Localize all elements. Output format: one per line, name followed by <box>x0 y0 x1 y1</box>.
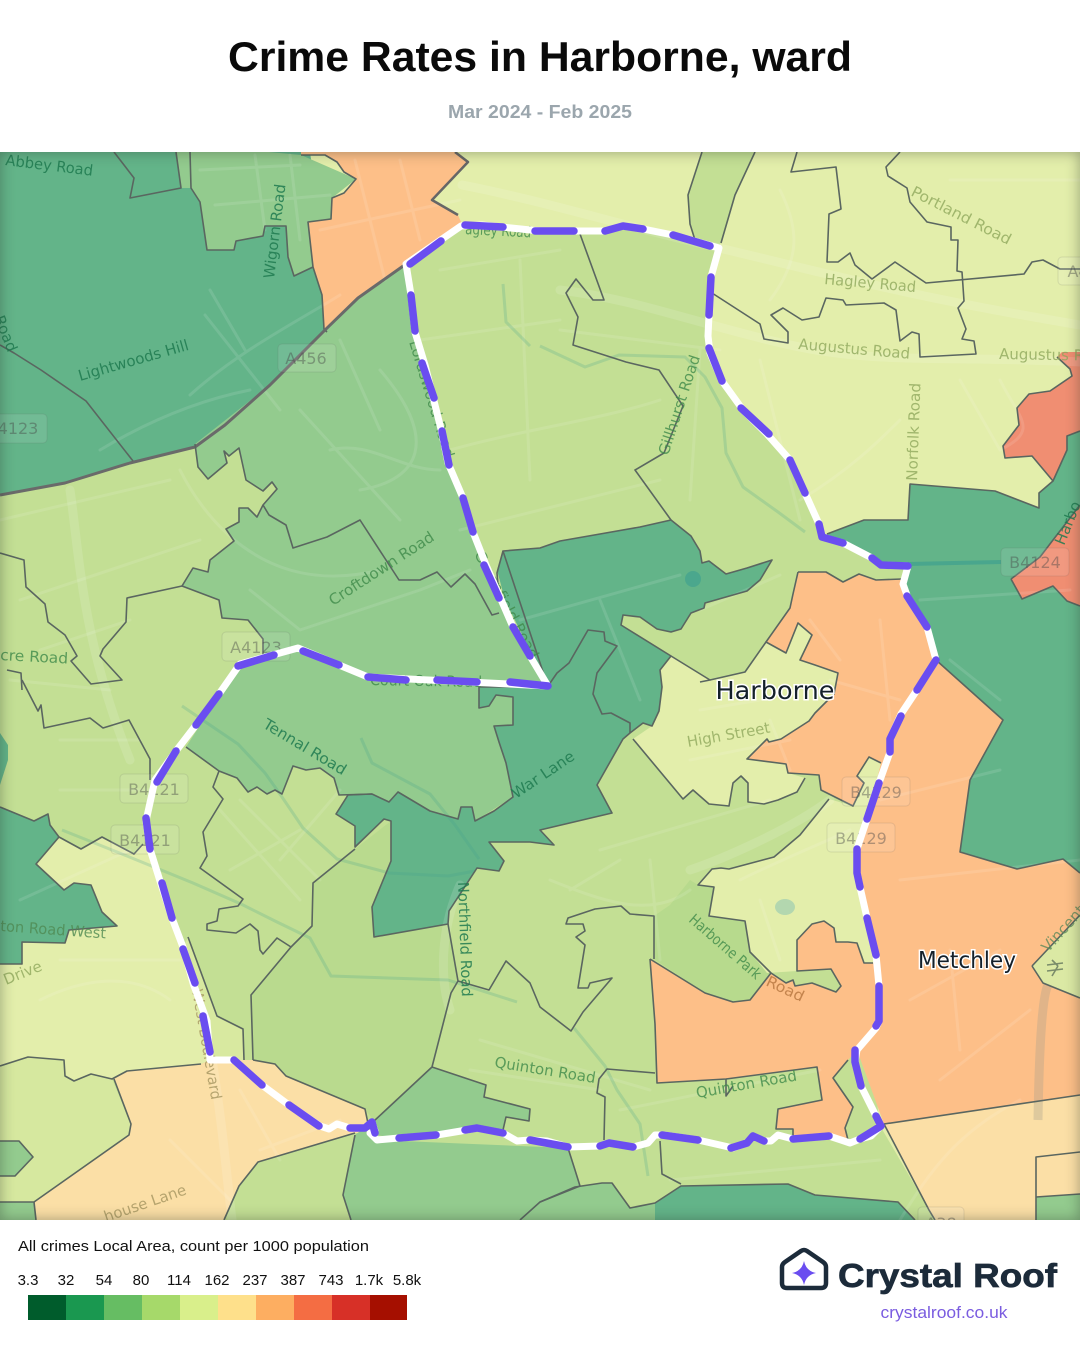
place label: Metchley: Metchley <box>918 948 1016 974</box>
road labels: cre Road <box>0 646 69 668</box>
area: southern mid green <box>343 1122 580 1220</box>
road number badges: B4121 <box>119 831 171 850</box>
water channels <box>62 284 1048 1176</box>
logo: Crystal Roof <box>782 1250 1058 1322</box>
ward boundary: Harborne <box>146 225 936 1148</box>
legend tick labels: 1.7k <box>355 1272 384 1289</box>
road labels: Northfield Road <box>454 882 476 997</box>
road number badges: B4129 <box>835 829 887 848</box>
road labels: Harborne Park <box>685 910 765 983</box>
road number badges <box>0 257 1080 1235</box>
road labels: Greenfield Road <box>470 547 543 662</box>
area: east orange Harborne and Metchley <box>747 566 1080 1124</box>
road labels: Road <box>763 972 807 1006</box>
area: Metchley railway pale <box>1032 915 1080 998</box>
area: south-west dark green <box>0 807 117 964</box>
area: lower orange Harborne Park <box>650 921 879 1140</box>
area: central dark green <box>336 520 772 937</box>
legend tick labels: 387 <box>280 1272 306 1289</box>
area: central south lime darker <box>251 821 458 1121</box>
road labels: Lightwoods Hill <box>76 336 191 385</box>
road number badges: B4129 <box>850 783 902 802</box>
road labels: Quinton Road <box>695 1067 798 1102</box>
legend tick labels: 162 <box>204 1272 230 1289</box>
area: pale between B4129 <box>698 757 881 973</box>
road number badges: B4124 <box>1009 553 1061 572</box>
area: west lime base <box>0 225 936 1220</box>
area: mid green above ward <box>374 1067 530 1138</box>
place label: Harborne: Harborne <box>716 676 834 705</box>
area: Tennal Road mid green <box>186 652 512 820</box>
area: bottom dark green <box>655 1184 915 1220</box>
legend tick labels: 114 <box>167 1272 191 1289</box>
area: north-west mid green block <box>176 152 356 276</box>
area: Metchley south pale orange <box>884 1095 1080 1220</box>
area: south-east corner mid green <box>1036 1194 1080 1220</box>
road labels: High Street <box>686 719 772 751</box>
road labels: Quinton Road <box>493 1053 597 1087</box>
area: bottom-left mid green <box>0 1202 36 1220</box>
area: salmon east <box>1011 505 1080 606</box>
area: bottom mid green <box>520 1183 655 1220</box>
road labels: Wigorn Road <box>260 183 290 279</box>
area: small pale wedge by West Boulevard <box>183 937 244 1060</box>
legend tick labels: 32 <box>58 1272 74 1289</box>
legend tick labels: 5.8k <box>393 1272 422 1289</box>
legend tick labels: 237 <box>242 1272 268 1289</box>
area: east dark green <box>827 431 1080 873</box>
logo url: crystalroof.co.uk <box>880 1304 1008 1322</box>
road labels: Croftdown Road <box>325 528 437 609</box>
road labels: Drive <box>1 957 45 989</box>
road number badges: A4123 <box>230 638 282 657</box>
road labels: house Lane <box>101 1181 189 1226</box>
road labels: War Lane <box>508 747 578 802</box>
road network <box>0 155 1080 1220</box>
road labels: Norfolk Road <box>903 383 924 481</box>
area: Croftdown mid green <box>182 264 548 686</box>
area: lime strip north <box>688 152 755 248</box>
area: south-west pale <box>0 837 210 1081</box>
area: salmon north-east <box>1003 352 1080 481</box>
legend tick labels: 3.3 <box>18 1272 38 1289</box>
road labels: Abbey Road <box>5 151 94 180</box>
area: Harborne high street pale <box>633 623 838 806</box>
title: Crime Rates in Harborne, ward <box>228 33 852 80</box>
road number badges: B4121 <box>128 780 180 799</box>
road labels: ton Road West <box>0 917 107 942</box>
logo wordmark: Crystal Roof <box>838 1258 1058 1295</box>
road labels: West Boulevard <box>188 988 225 1101</box>
road labels: Gillhurst Road <box>655 353 704 457</box>
road labels: Augustus Road <box>798 335 911 363</box>
area: north-west dark green <box>0 152 330 495</box>
icon: railway station <box>1047 960 1063 976</box>
area: south pale orange <box>34 1060 370 1220</box>
legend tick labels: 743 <box>318 1272 344 1289</box>
legend <box>18 1238 422 1320</box>
road number badges: A456 <box>285 349 327 368</box>
area boundaries <box>0 152 1080 1220</box>
road number badges: A38 <box>925 1214 957 1233</box>
icon: house with star <box>782 1250 826 1288</box>
area: north-west orange <box>301 152 468 332</box>
road labels: Tennal Road <box>259 714 350 779</box>
legend tick labels <box>18 1272 422 1289</box>
subtitle: date range: Mar 2024 - Feb 2025 <box>448 101 632 122</box>
road labels: agley Road <box>465 220 532 241</box>
road labels: Hagley Road <box>824 270 917 296</box>
area: western dark sliver <box>0 733 8 785</box>
road labels: Court Oak Road <box>370 671 482 691</box>
legend title: All crimes Local Area, count per 1000 population <box>18 1238 369 1255</box>
road labels: Portland Road <box>908 183 1014 249</box>
area: south-west blob <box>0 1141 33 1176</box>
road labels <box>0 151 1080 1226</box>
road labels: Lordswood Road <box>405 338 458 460</box>
area: Harborne Park lime darker <box>654 880 771 1002</box>
legend colour scale <box>28 1295 407 1320</box>
legend tick labels: 54 <box>96 1272 112 1289</box>
area: south-west corner lime <box>0 1057 131 1202</box>
legend tick labels: 80 <box>133 1272 149 1289</box>
